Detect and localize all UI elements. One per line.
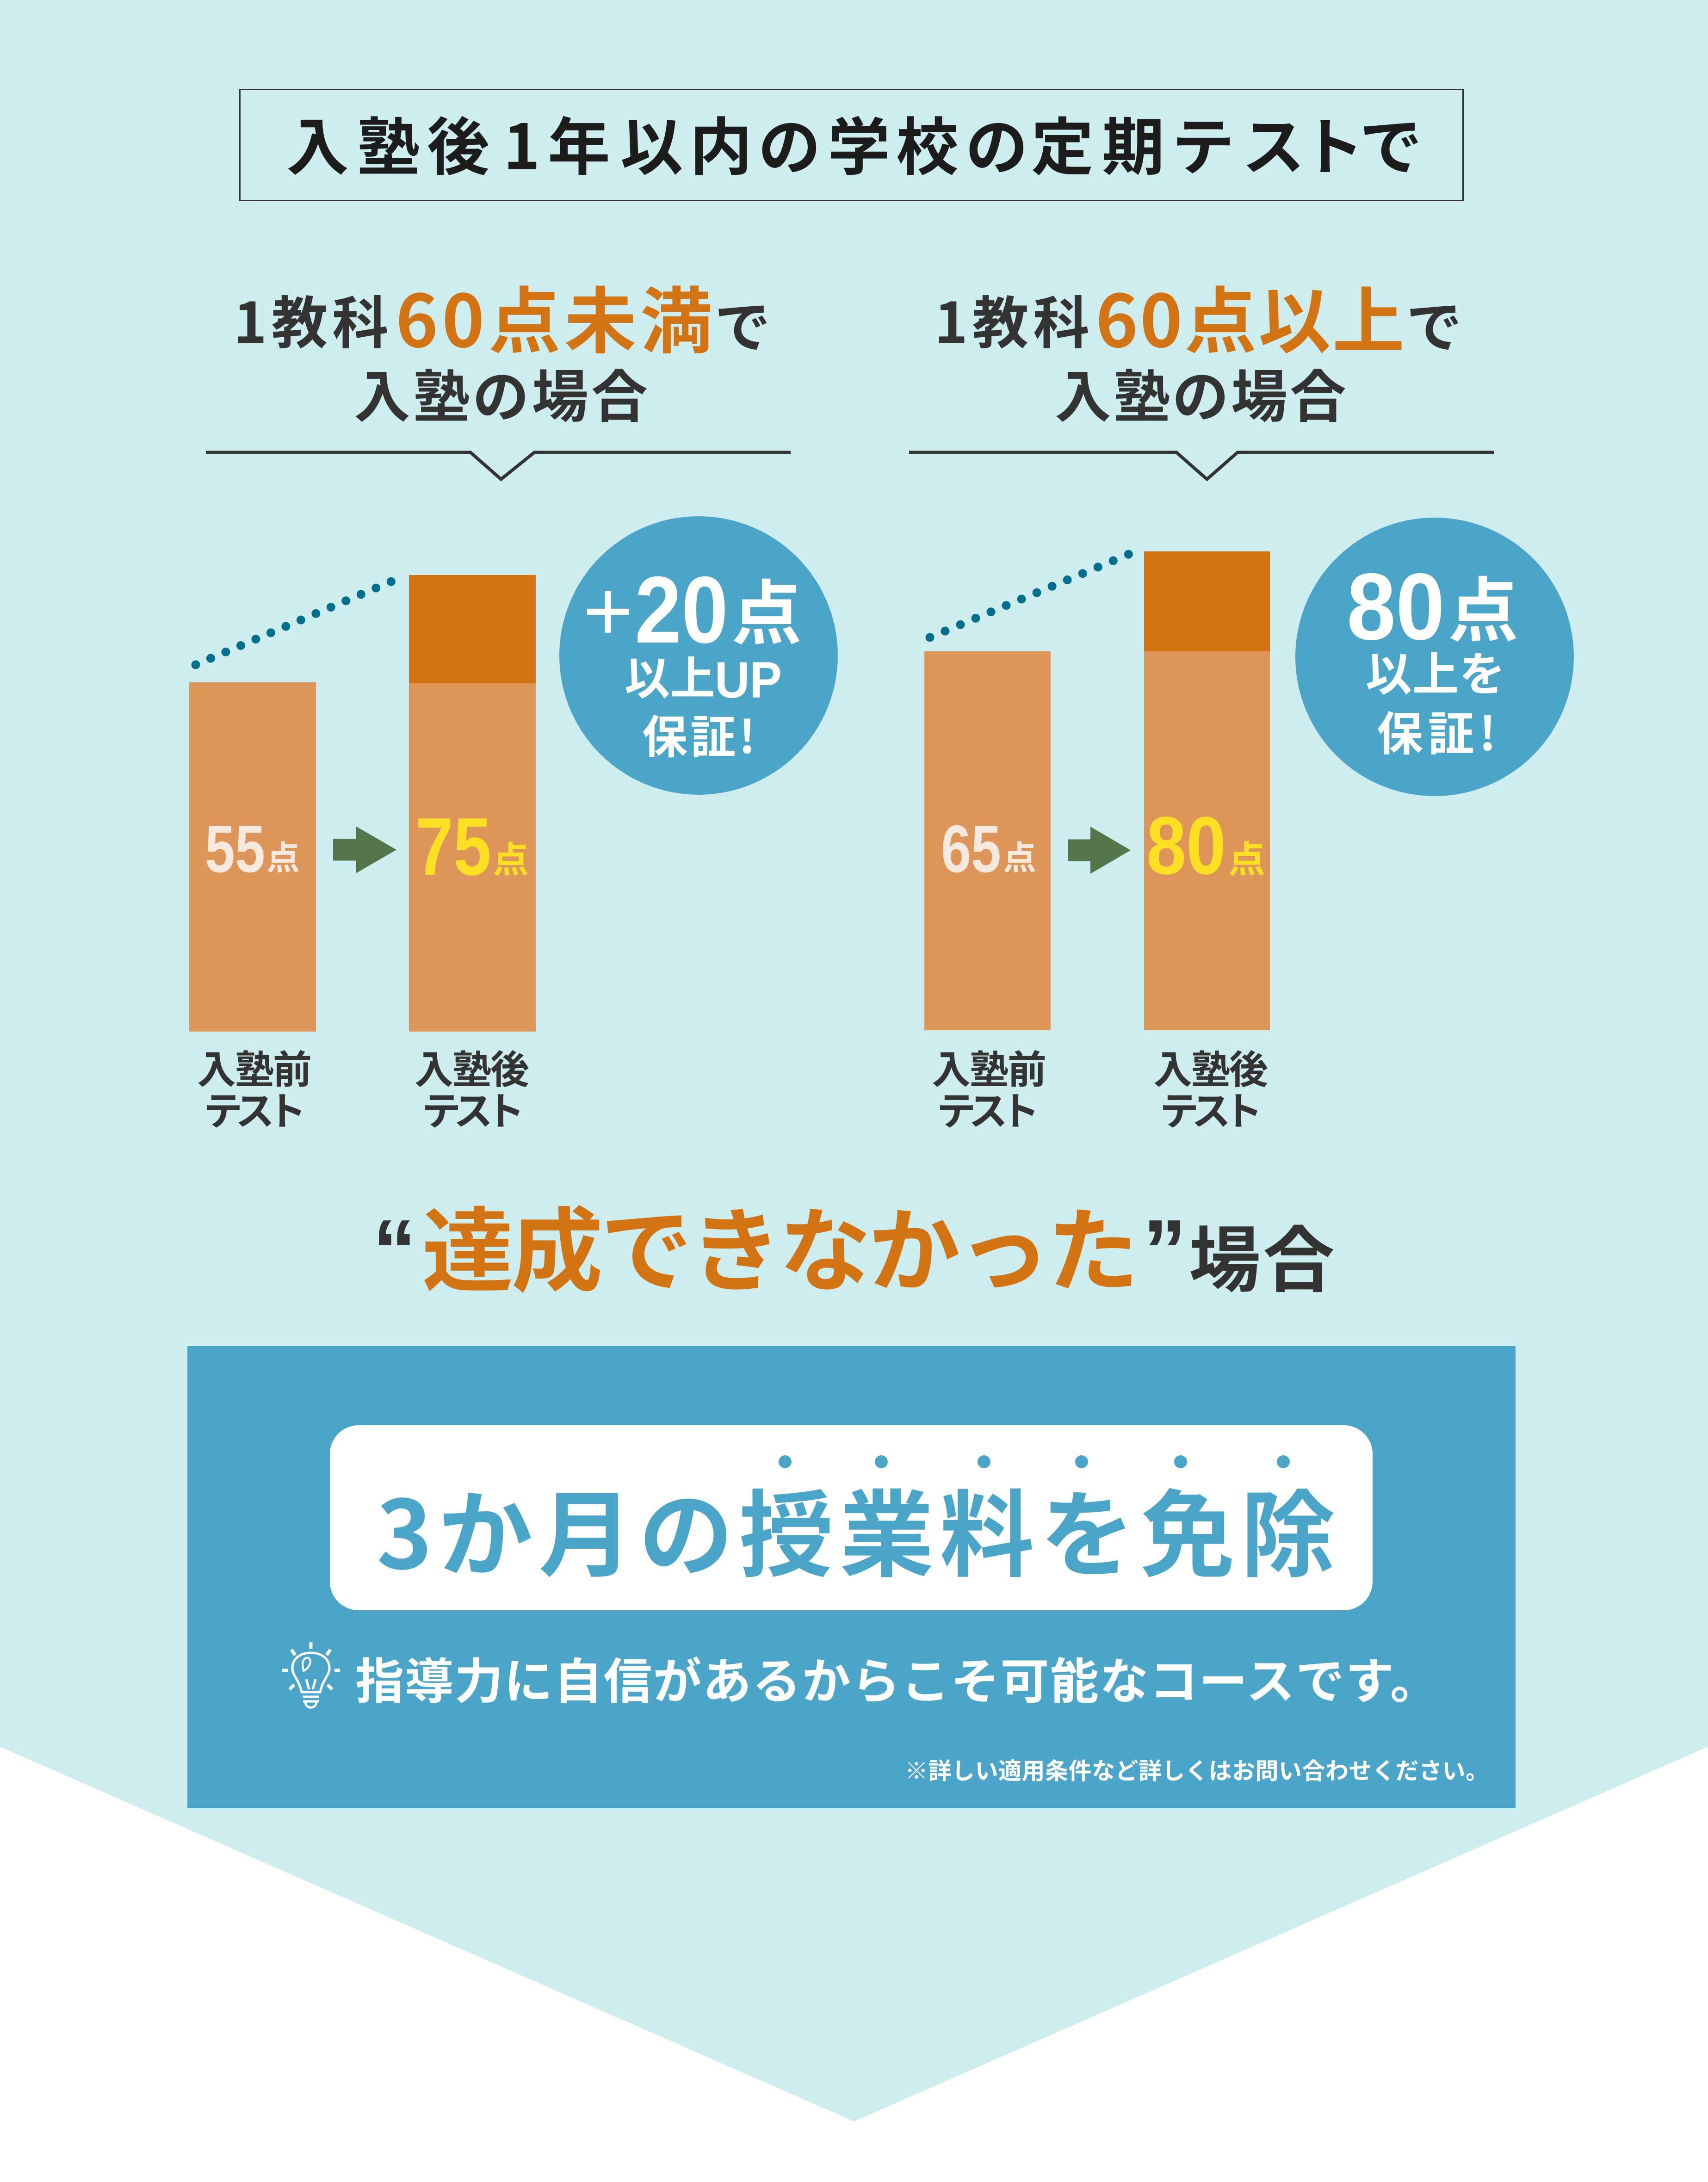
trend dots left bbox=[196, 581, 391, 665]
bar labels right: テスト bbox=[1160, 1081, 1262, 1137]
icon: light bulb bbox=[282, 1642, 340, 1707]
value 65: 点 bbox=[1003, 831, 1036, 879]
value 75: 点 bbox=[493, 831, 529, 883]
tagline: 指導力に自信があるからこそ可能なコースです。 bbox=[355, 1643, 1439, 1713]
bar labels right bbox=[932, 1039, 1268, 1137]
bar after right bbox=[1144, 551, 1270, 1030]
subheading: could not achieve: ” bbox=[1143, 1202, 1187, 1300]
badge: +20 points bbox=[559, 516, 838, 795]
bar labels left: テスト bbox=[204, 1081, 306, 1137]
panel: over 60 points heading: 入塾の場合 bbox=[1055, 352, 1346, 433]
badge: +20 points: 保証! bbox=[642, 701, 755, 766]
panel: under 60 points heading bbox=[206, 263, 791, 479]
badge: +20 points: 20 bbox=[635, 557, 728, 663]
callout: white headline box: 3か月の授業料を免除 bbox=[377, 1459, 1335, 1596]
bar before left bbox=[189, 682, 316, 1032]
panel: over 60 points heading bbox=[909, 263, 1494, 479]
badge: 80 points: 保証! bbox=[1377, 697, 1496, 764]
badge: 80 points: 以上を bbox=[1366, 637, 1505, 704]
subheading: could not achieve: “ bbox=[372, 1202, 416, 1300]
badge: 80 points: 点 bbox=[1448, 554, 1518, 656]
panel: under 60 points heading: 入塾の場合 bbox=[354, 352, 648, 433]
panel: under 60 points heading: 1教科 bbox=[234, 278, 389, 360]
emphasis dots bbox=[779, 1455, 1290, 1468]
value 80: 点 bbox=[1228, 830, 1265, 884]
badge: +20 points: UP bbox=[715, 652, 782, 709]
bar labels left: 入塾後 bbox=[415, 1039, 529, 1095]
subheading: could not achieve: 場合 bbox=[1189, 1202, 1335, 1306]
bar labels left bbox=[197, 1039, 529, 1137]
badge: +20 points: 以上 bbox=[625, 642, 715, 708]
badge: 80 points bbox=[1295, 518, 1574, 796]
footnote: ※詳しい適用条件など詳しくはお問い合わせください。 bbox=[905, 1753, 1489, 1786]
panel: over 60 points heading: 60点以上 bbox=[1095, 263, 1405, 368]
panel: tuition waiver bbox=[187, 1346, 1516, 1808]
value 80: 80 bbox=[1146, 800, 1226, 891]
bar labels right: 入塾後 bbox=[1153, 1039, 1268, 1095]
bar before right bbox=[924, 651, 1051, 1030]
panel: under 60 points heading: 60点未満 bbox=[396, 263, 712, 368]
badge: +20 points: + bbox=[583, 563, 633, 659]
bar chart: right bbox=[924, 551, 1270, 1137]
panel: over 60 points heading: 1教科 bbox=[934, 278, 1089, 360]
panel: over 60 points heading: で bbox=[1406, 283, 1462, 363]
trend dots right bbox=[930, 554, 1129, 637]
value 55: 55 bbox=[205, 811, 265, 886]
title box: 入塾後1年以内の学校の定期テストで bbox=[286, 97, 1422, 187]
value 75: 75 bbox=[415, 801, 491, 892]
subheading: could not achieve: 達成できなかった bbox=[422, 1178, 1139, 1310]
badge: 80 points: 80 bbox=[1347, 554, 1445, 660]
bar labels left: テスト bbox=[422, 1081, 525, 1137]
callout: white headline box bbox=[330, 1425, 1373, 1610]
bar labels right: テスト bbox=[937, 1081, 1040, 1137]
bar chart: left bbox=[189, 575, 536, 1137]
panel: under 60 points heading: で bbox=[715, 283, 770, 363]
arrow right bbox=[1068, 827, 1131, 874]
bar after left bbox=[409, 575, 536, 1032]
badge: +20 points: 点 bbox=[731, 557, 802, 659]
bar labels right: 入塾前 bbox=[932, 1039, 1046, 1095]
value 55: 点 bbox=[266, 831, 300, 879]
arrow left bbox=[333, 826, 396, 873]
bar labels left: 入塾前 bbox=[197, 1039, 312, 1095]
value 65: 65 bbox=[941, 811, 1001, 886]
